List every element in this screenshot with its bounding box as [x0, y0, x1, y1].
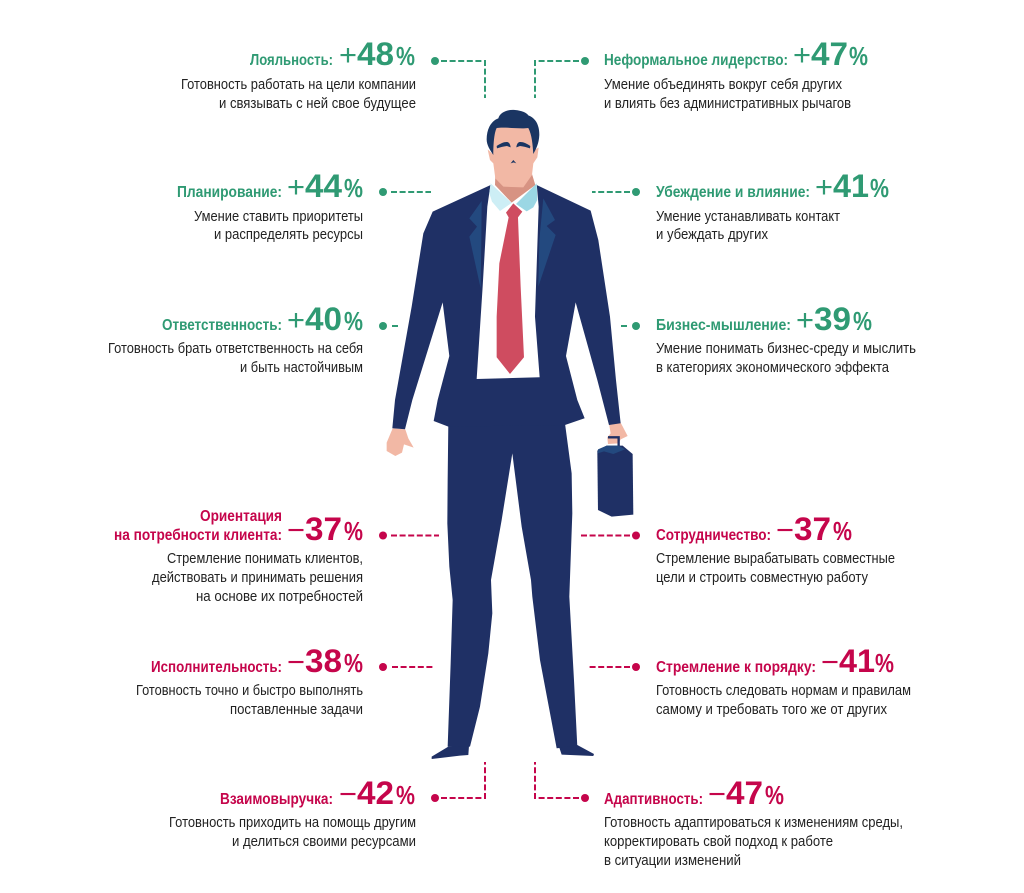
block: Исполнительность: −: [287, 646, 305, 679]
block: Бизнес-мышление: 39: [814, 301, 851, 337]
block: Стремление к порядку: 41: [839, 643, 875, 679]
block: Убеждение и влияние: Убеждение и влияние:: [656, 184, 810, 201]
block: Ориентация на потребности клиента: действовать и принимать решения: [152, 569, 363, 586]
block: Ответственность: [108, 301, 363, 376]
connector: Неформальное лидерство: [535, 57, 589, 98]
block: Ориентация на потребности клиента: Стремление понимать клиентов,: [167, 550, 363, 567]
connector: Убеждение и влияние: [592, 188, 640, 196]
block: Неформальное лидерство: 47: [811, 36, 848, 72]
shoes: [432, 745, 594, 759]
block: Адаптивность: в ситуации изменений: [604, 852, 741, 869]
block: Убеждение и влияние: %: [870, 173, 889, 203]
block: Исполнительность: %: [344, 648, 363, 678]
connector: Взаимовыручка: [431, 762, 485, 802]
block: Исполнительность: [136, 643, 363, 718]
block: Планирование: +: [287, 171, 305, 204]
block: Ответственность: и быть настойчивым: [240, 359, 363, 376]
trousers: [447, 423, 577, 748]
block: Ориентация на потребности клиента: на основе их потребностей: [196, 588, 363, 605]
block: Адаптивность: %: [765, 780, 784, 810]
block: Сотрудничество: Стремление вырабатывать совместные: [656, 550, 895, 567]
block: Ориентация на потребности клиента: −: [287, 514, 305, 547]
block: Стремление к порядку: Стремление к порядку:: [656, 659, 816, 676]
block: Бизнес-мышление: в категориях экономического эффекта: [656, 359, 890, 376]
block: Стремление к порядку: Готовность следовать нормам и правилам: [656, 682, 911, 699]
block: Стремление к порядку: [656, 643, 911, 718]
block: Ориентация на потребности клиента: 37: [305, 511, 342, 547]
face: [488, 127, 539, 187]
neck: [495, 174, 535, 203]
block: Убеждение и влияние: и убеждать других: [656, 226, 768, 243]
block: Ответственность: Ответственность:: [162, 317, 282, 334]
left hand: [387, 428, 414, 456]
jacket: [392, 110, 621, 429]
block: Ориентация на потребности клиента: [114, 508, 363, 605]
block: Сотрудничество: −: [776, 514, 794, 547]
eyebrows and nose: [497, 142, 530, 163]
block: Бизнес-мышление: [656, 301, 916, 376]
block: Исполнительность: 38: [305, 643, 342, 679]
block: Бизнес-мышление: Умение понимать бизнес-среду и мыслить: [656, 340, 916, 357]
block: Ответственность: %: [344, 306, 363, 336]
block: Убеждение и влияние: 41: [833, 168, 869, 204]
connector: Исполнительность: [379, 663, 435, 671]
block: Неформальное лидерство: Неформальное лидерство:: [604, 52, 788, 69]
block: Взаимовыручка: Взаимовыручка:: [220, 791, 333, 808]
connector: Бизнес-мышление: [619, 322, 640, 330]
block: Ответственность: Готовность брать ответственность на себя: [108, 340, 363, 357]
right hand: [607, 423, 628, 444]
block: Сотрудничество: [656, 511, 895, 586]
block: Ответственность: 40: [305, 301, 342, 337]
block: Лояльность: [181, 36, 416, 112]
block: Бизнес-мышление: %: [853, 306, 872, 336]
briefcase: [597, 446, 633, 517]
block: Взаимовыручка: Готовность приходить на помощь другим: [169, 814, 416, 831]
block: Лояльность: и связывать с ней свое будущее: [219, 95, 416, 112]
block: Адаптивность: корректировать свой подход к работе: [604, 833, 833, 850]
tie: [497, 203, 524, 374]
connector: Сотрудничество: [581, 532, 640, 540]
block: Бизнес-мышление: +: [796, 304, 814, 337]
shirt: [477, 183, 540, 379]
block: Ориентация на потребности клиента: %: [344, 516, 363, 546]
block: Ориентация на потребности клиента: Ориентация: [200, 508, 282, 525]
lapels: [469, 198, 556, 288]
block: Взаимовыручка: 42: [357, 775, 394, 811]
block: Неформальное лидерство: [604, 36, 868, 112]
block: Ответственность: +: [287, 304, 305, 337]
block: Бизнес-мышление: Бизнес-мышление:: [656, 317, 791, 334]
block: Убеждение и влияние: +: [815, 171, 833, 204]
block: Убеждение и влияние: [656, 168, 889, 243]
block: Планирование: Умение ставить приоритеты: [194, 208, 363, 225]
block: Взаимовыручка: −: [339, 778, 357, 811]
block: Исполнительность: поставленные задачи: [230, 701, 363, 718]
block: Планирование: %: [344, 173, 363, 203]
block: Лояльность: Готовность работать на цели компании: [181, 76, 416, 93]
connector: Стремление к порядку: [589, 663, 640, 671]
collar: [489, 183, 512, 211]
block: Лояльность: 48: [357, 36, 394, 72]
block: Сотрудничество: 37: [794, 511, 831, 547]
block: Исполнительность: Исполнительность:: [151, 659, 282, 676]
hair: [487, 110, 539, 155]
connector: Ориентация: [379, 532, 439, 540]
connector: Адаптивность: [535, 762, 589, 802]
block: Лояльность: +: [339, 39, 357, 72]
briefcase handle: [608, 437, 619, 446]
block: Взаимовыручка: и делиться своими ресурсами: [232, 833, 416, 850]
block: Адаптивность: Адаптивность:: [604, 791, 703, 808]
block: Ориентация на потребности клиента: на потребности клиента:: [114, 527, 282, 544]
block: Адаптивность: Готовность адаптироваться к изменениям среды,: [604, 814, 903, 831]
block: Планирование: 44: [305, 168, 342, 204]
block: Сотрудничество: %: [833, 516, 852, 546]
block: Неформальное лидерство: и влиять без административных рычагов: [604, 95, 851, 112]
block: Исполнительность: Готовность точно и быстро выполнять: [136, 682, 363, 699]
businessman figure: [387, 110, 633, 759]
connector: Лояльность: [431, 57, 485, 98]
block: Лояльность: Лояльность:: [250, 52, 333, 69]
block: Стремление к порядку: −: [821, 646, 839, 679]
block: Неформальное лидерство: Умение объединять вокруг себя других: [604, 76, 842, 93]
block: Сотрудничество: Сотрудничество:: [656, 527, 771, 544]
block: Стремление к порядку: самому и требовать того же от других: [656, 701, 887, 718]
connector: Планирование: [379, 188, 431, 196]
block: Адаптивность: [604, 775, 903, 869]
block: Убеждение и влияние: Умение устанавливать контакт: [656, 208, 840, 225]
block: Стремление к порядку: %: [875, 648, 894, 678]
block: Адаптивность: 47: [726, 775, 763, 811]
block: Адаптивность: −: [708, 778, 726, 811]
connector: Ответственность: [379, 322, 398, 330]
block: Сотрудничество: цели и строить совместную работу: [656, 569, 868, 586]
block: Планирование: Планирование:: [177, 184, 282, 201]
block: Неформальное лидерство: +: [793, 39, 811, 72]
block: Лояльность: %: [396, 41, 415, 71]
block: Планирование: [177, 168, 363, 243]
block: Взаимовыручка: [169, 775, 416, 850]
block: Неформальное лидерство: %: [849, 41, 868, 71]
block: Планирование: и распределять ресурсы: [214, 226, 363, 243]
block: Взаимовыручка: %: [396, 780, 415, 810]
